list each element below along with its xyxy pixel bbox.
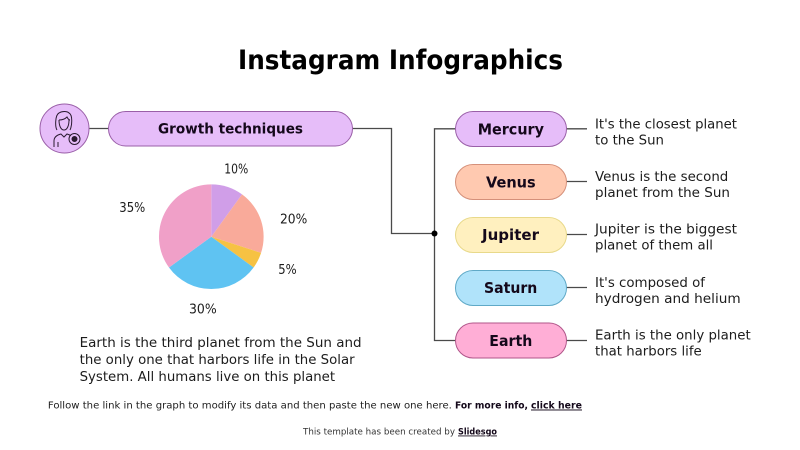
pie labels: 5%: [278, 263, 297, 278]
footer note: Follow the link in the graph to modify its data and then paste the new one here.: [48, 400, 452, 412]
icon: influencer: [40, 104, 89, 153]
planet: earth: Earth: [489, 332, 532, 350]
credit line: Slidesgo: [458, 428, 497, 438]
pie labels: [119, 162, 307, 317]
description text: Earth is the third planet from the Sun and: [80, 336, 362, 351]
heading pill: growth techniques: [108, 112, 352, 146]
footer note: For more info,: [455, 400, 528, 412]
description text: System. All humans live on this planet: [80, 370, 335, 385]
planet: venus: Venus: [486, 174, 536, 192]
planet: jupiter: Jupiter: [481, 226, 540, 244]
planet: mercury: [456, 112, 737, 148]
planet: earth: that harbors life: [595, 345, 702, 360]
footer note: click here: [531, 400, 582, 412]
title: Instagram Infographics: [238, 45, 563, 76]
planet: jupiter: [456, 218, 737, 254]
credit line: This template has been created by: [302, 428, 455, 438]
planet: saturn: It's composed of: [595, 276, 705, 291]
pie labels: 30%: [189, 302, 217, 317]
planet: mercury: to the Sun: [595, 134, 664, 148]
planet: venus: Venus is the second: [595, 170, 728, 185]
planet: mercury: It's the closest planet: [595, 118, 737, 132]
planet: saturn: hydrogen and helium: [595, 292, 741, 307]
description text: the only one that harbors life in the Solar: [80, 353, 355, 368]
pie labels: 10%: [224, 162, 248, 177]
pie labels: 20%: [280, 212, 307, 227]
planet: venus: [456, 164, 730, 201]
pie labels: 35%: [119, 201, 145, 216]
planet: earth: [456, 323, 751, 360]
planet: jupiter: planet of them all: [595, 239, 713, 254]
connector: growth techniques to planets: [89, 128, 587, 340]
planet: earth: Earth is the only planet: [595, 329, 751, 344]
planet: saturn: Saturn: [484, 279, 537, 297]
heading pill: growth techniques: Growth techniques: [158, 122, 303, 138]
planet: jupiter: Jupiter is the biggest: [594, 223, 737, 238]
planet: saturn: [456, 270, 741, 307]
planet: mercury: Mercury: [478, 120, 544, 138]
description text: [80, 336, 362, 385]
pie chart: [159, 184, 264, 289]
planet: venus: planet from the Sun: [595, 186, 730, 201]
